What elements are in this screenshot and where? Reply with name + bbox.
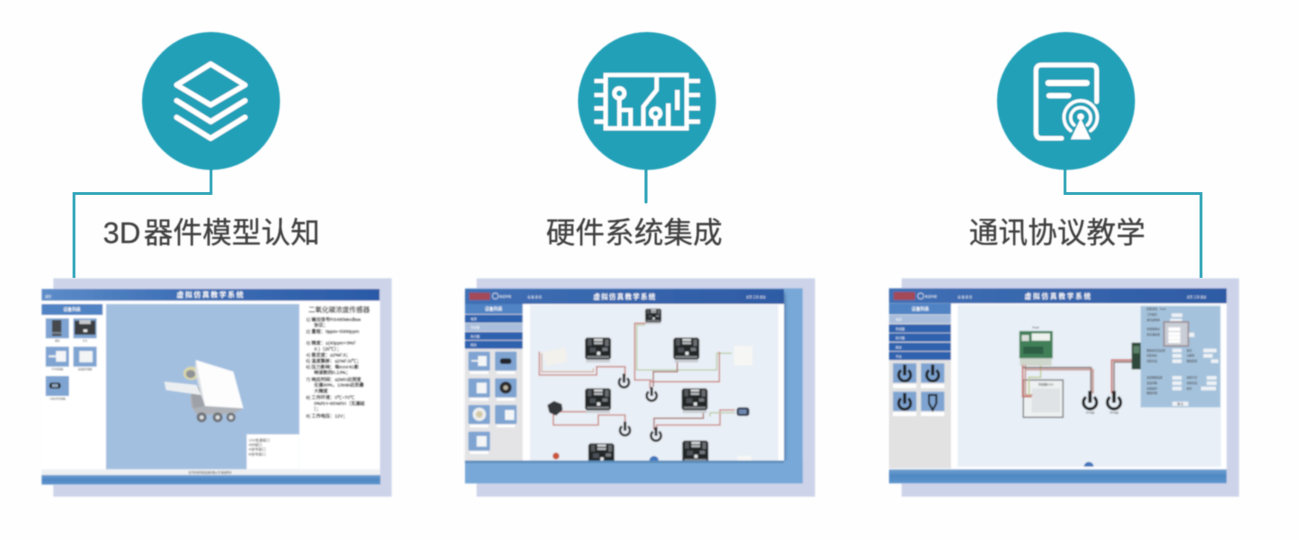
heading 2: 硬件系统集成 — [546, 217, 722, 250]
sidebar menu — [465, 304, 523, 461]
panel backing — [902, 278, 1239, 497]
wiring canvas — [958, 305, 1221, 467]
device thumbnails: CO2传感器 — [51, 367, 64, 371]
sidebar menu: 电源 — [896, 317, 902, 322]
sensor specification text: 2) 量程：0ppm~5000ppm — [306, 328, 359, 335]
footer strip: 北京仿真科技发展有限公司 版权所有 — [188, 470, 232, 474]
sensor specification text — [306, 305, 370, 419]
window header: 设 备 连 接 — [958, 294, 972, 299]
panel backing — [53, 278, 392, 497]
app window — [889, 288, 1227, 483]
bottom tab marker — [1084, 462, 1094, 467]
window header: 虚拟仿真教学系统 — [593, 292, 656, 301]
configuration dialog: 数据帧长度设置 — [1147, 348, 1166, 352]
port legend — [247, 434, 299, 469]
configuration dialog: 通讯波特率 — [1147, 318, 1160, 322]
configuration dialog: 接收超时 — [1147, 386, 1158, 390]
configuration dialog: 读取长度 — [1147, 359, 1158, 363]
device thumbnails: 人体红外传感器 — [49, 396, 66, 400]
sidebar header — [42, 304, 103, 315]
configuration dialog: 格式 — [1187, 386, 1192, 390]
heading 1: 3D器件模型认知 — [103, 217, 320, 250]
wires — [539, 323, 735, 430]
device thumbnails: 温湿度传感器 — [78, 367, 93, 371]
port legend: B信号接口 — [249, 451, 266, 456]
blue backing layer — [465, 288, 803, 483]
controller board: Push — [1032, 326, 1039, 330]
sensor specification text: 3) 精度：±(40ppm+3%F — [306, 340, 356, 347]
configuration dialog: 工作模式 — [1147, 313, 1158, 317]
configuration dialog: 数据类型 — [1187, 359, 1198, 363]
icon: circuit board in teal circle — [578, 32, 716, 170]
lower blue band covering cropped content — [465, 461, 803, 483]
sidebar menu: 设备列表 — [912, 306, 930, 313]
sensor specification text: 8) 工作环境：0℃~70℃ — [306, 394, 355, 401]
configuration dialog: 寄存器起始 — [1147, 333, 1160, 337]
sensor specification text: 9) 工作电压：12V； — [306, 412, 348, 419]
power switches: 24V电源 — [1110, 410, 1119, 414]
sidebar menu: 网关 — [471, 342, 477, 347]
power switches — [1083, 391, 1121, 414]
connector: circle 3 to screen 3 — [1065, 168, 1201, 278]
sensor specification text: 5) 温度飘移：≤2%F.S/℃； — [306, 358, 361, 365]
configuration dialog: 发送数据设置 — [1147, 376, 1163, 380]
port legend: 12V电源接口 — [249, 437, 270, 442]
sensor specification text: 响读数的0.13%； — [314, 369, 350, 376]
device thumbnails — [46, 318, 97, 400]
port legend: 485接口 — [249, 442, 262, 447]
connector: circle 2 to heading 2 — [644, 168, 648, 202]
app window — [465, 289, 784, 461]
sensor specification text: 7) 响应时间：≤2Min达到变 — [306, 376, 362, 383]
configuration dialog: 传感器地址 — [1147, 327, 1160, 331]
connector: circle 1 to screen 1 — [74, 168, 211, 278]
sensor specification text: 化值90%，10min达到最 — [314, 382, 364, 389]
configuration dialog: 确 定 — [1177, 402, 1184, 406]
sidebar menu — [889, 303, 951, 468]
sensor box — [1023, 380, 1063, 417]
footer strip — [42, 469, 380, 485]
sidebar thumbnails — [468, 352, 517, 454]
window header: 新道中和 — [499, 293, 511, 298]
window header: 主页 工具 退出 — [1187, 294, 1206, 299]
window header: 新道中和 — [925, 293, 937, 298]
window header — [42, 289, 380, 301]
configuration dialog: 接收长度 — [1187, 381, 1198, 385]
wiring canvas — [530, 305, 778, 461]
app window — [42, 289, 380, 485]
sidebar menu: 传感器 — [896, 326, 905, 331]
sensor specification text: S )（25℃）； — [314, 346, 341, 352]
icon: document with signal in teal circle — [997, 32, 1135, 170]
sensor specification text: 1) 输出信号RS485Modbus — [306, 316, 362, 323]
panel: 3D model screenshot — [42, 278, 392, 497]
controller board — [1019, 326, 1053, 366]
window header: 虚拟仿真教学系统 — [177, 290, 243, 299]
sensor specification text: 0%RH~95%RH（无凝结 — [314, 400, 365, 407]
icon: layers in teal circle — [142, 32, 280, 170]
sidebar power tiles — [893, 363, 944, 416]
configuration dialog: 格式 — [1187, 348, 1192, 352]
sensor specification text: ）； — [314, 407, 321, 413]
configuration dialog: 读取地址 — [1147, 354, 1158, 358]
window header: 虚拟仿真教学系统 — [1025, 292, 1091, 301]
port legend: A信号接口 — [249, 447, 266, 452]
configuration dialog: 配置项目：Push — [1147, 307, 1167, 311]
wires — [1023, 360, 1135, 397]
panel: hardware integration screenshot — [465, 278, 815, 497]
sensor specification text: 6) 压力影响：每mmHG影 — [306, 363, 359, 370]
device thumbnails: 模块 — [55, 338, 60, 342]
footer bar — [889, 469, 1227, 483]
peripheral sensors — [543, 346, 752, 461]
circuit modules — [585, 309, 708, 468]
sidebar header: 设备列表 — [63, 306, 81, 313]
panel: communication protocol screenshot — [889, 278, 1239, 497]
sidebar menu: 执行器 — [471, 333, 480, 338]
sensor specification text: 4) 稳定度：≤2%F.S； — [306, 352, 351, 359]
power switches — [619, 374, 661, 441]
window header: 设 备 连 接 — [527, 294, 542, 299]
sidebar menu: 执行器 — [896, 335, 905, 340]
configuration dialog: 发送间隔 — [1147, 381, 1158, 385]
sensor specification text: 二氧化碳浓度传感器 — [308, 305, 370, 314]
device thumbnails: 开关 — [83, 338, 88, 342]
right device module — [1132, 343, 1141, 369]
window bottom shadow — [465, 461, 784, 463]
window header — [889, 288, 1227, 303]
heading 3: 通讯协议教学 — [969, 217, 1145, 250]
sidebar menu: 网关 — [896, 344, 902, 349]
configuration dialog — [1141, 306, 1220, 407]
window shadow — [467, 293, 786, 464]
sensor specification text: 协议； — [314, 321, 328, 328]
sidebar menu: 设备列表 — [485, 306, 503, 313]
panel backing — [477, 278, 815, 497]
window header: 返回 — [45, 293, 51, 298]
3D sensor model — [164, 360, 243, 422]
sidebar menu: 传感器 — [471, 325, 480, 330]
window header — [465, 289, 784, 304]
3D viewport — [106, 304, 299, 469]
configuration dialog: 功能码 — [1187, 354, 1195, 358]
sidebar menu: 平台 — [896, 353, 902, 358]
window header: 主页 工具 退出 — [746, 294, 766, 299]
configuration dialog: 校验方式 — [1187, 376, 1198, 380]
sidebar menu: 电源 — [471, 316, 477, 321]
sensor specification text: 大精度 — [314, 387, 328, 394]
power switches: 12V电源 — [1086, 410, 1095, 414]
configuration dialog: 数据内容 — [1147, 391, 1158, 395]
sensor box: 传感器CO2 — [1038, 382, 1054, 387]
